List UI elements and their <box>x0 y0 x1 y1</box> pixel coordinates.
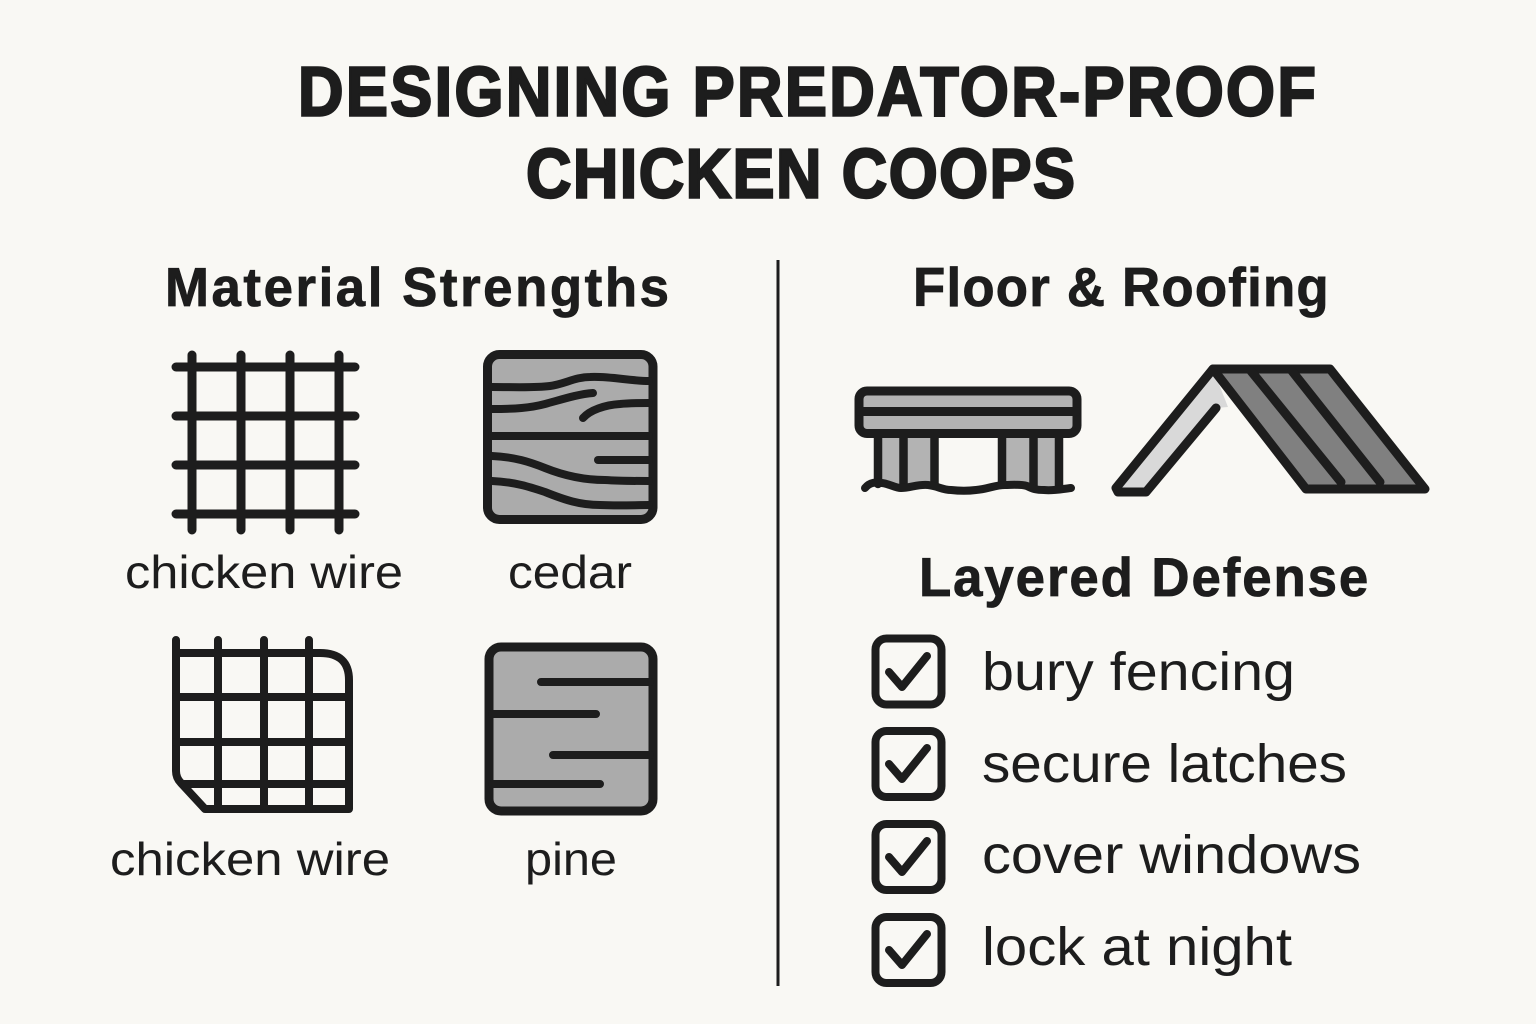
title <box>298 53 1316 213</box>
label: chicken wire: chicken wire <box>125 546 403 598</box>
label: cedar: cedar <box>508 546 632 598</box>
heading: layered defense: Layered Defense <box>919 547 1368 608</box>
icon: chicken wire panel <box>176 640 349 809</box>
label: chicken wire 2: chicken wire <box>110 833 390 885</box>
icon: cedar wood <box>488 354 653 520</box>
checklist item: lock at night: lock at night <box>982 917 1292 977</box>
checklist item: cover windows <box>876 824 1361 890</box>
icon: pitched roof <box>1116 369 1425 492</box>
title: CHICKEN COOPS <box>526 135 1075 213</box>
checklist item: bury fencing <box>876 638 1295 704</box>
checklist item: cover windows: cover windows <box>982 825 1361 885</box>
checklist item: bury fencing: bury fencing <box>982 642 1295 702</box>
heading: material strengths: Material Strengths <box>165 257 669 318</box>
title: DESIGNING PREDATOR-PROOF <box>298 53 1316 131</box>
icon: raised floor <box>859 391 1077 491</box>
checklist item: secure latches <box>876 731 1347 797</box>
divider <box>776 260 780 986</box>
icon: pine wood <box>489 647 653 811</box>
checklist item: secure latches: secure latches <box>982 734 1347 794</box>
icon: chicken wire grid <box>176 355 355 530</box>
checklist item: lock at night <box>876 917 1292 983</box>
heading: floor and roofing: Floor & Roofing <box>913 257 1329 318</box>
label: pine: pine <box>525 833 617 885</box>
